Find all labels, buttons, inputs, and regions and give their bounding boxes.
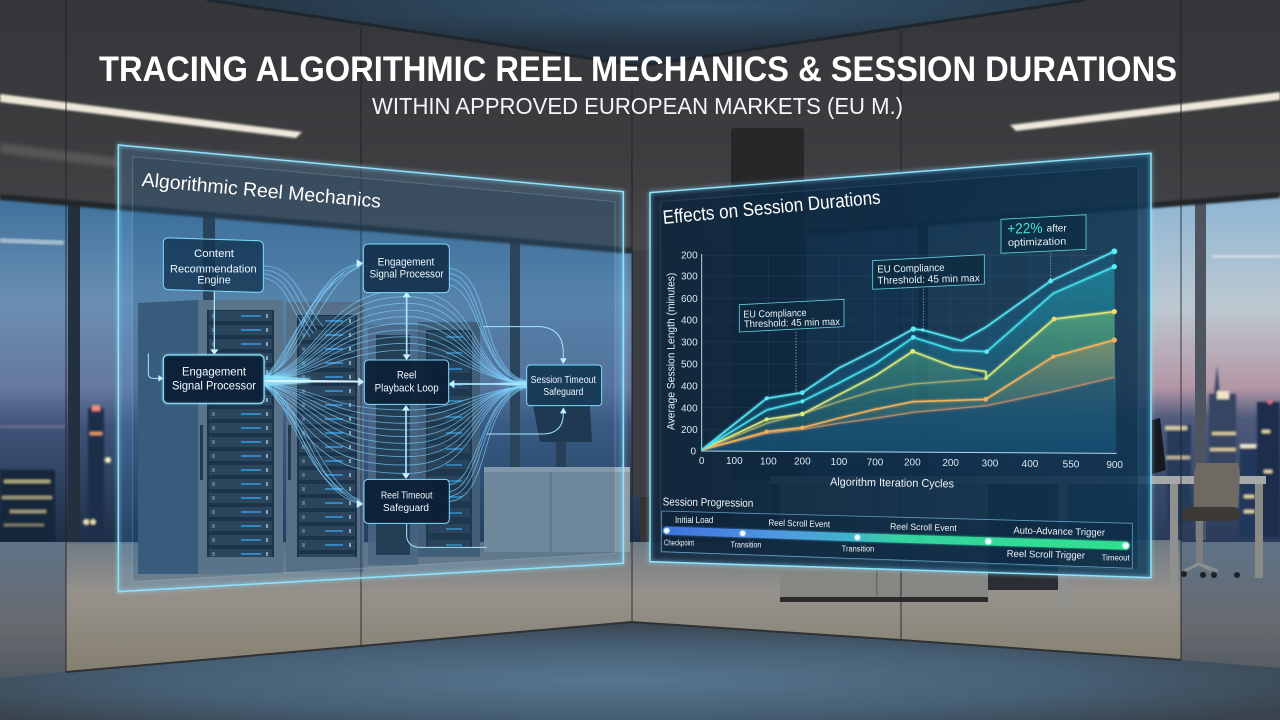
line chart — [665, 215, 1123, 490]
callout: +22% after optimization — [1001, 215, 1086, 253]
back cabinet — [484, 406, 630, 552]
panel heading: Algorithmic Reel Mechanics — [141, 170, 382, 213]
callout: compliance threshold center: Threshold: 45 min max — [877, 273, 981, 287]
arrowheads — [158, 259, 567, 508]
x axis labels: 200 — [794, 457, 811, 468]
timeline labels: Transition — [731, 540, 761, 549]
x axis labels: 550 — [1063, 459, 1080, 470]
x axis labels: 100 — [760, 456, 777, 467]
node: engagement signal processor top — [363, 244, 449, 293]
node: engagement signal processor left: Signal Processor — [172, 380, 256, 393]
y axis labels: 500 — [681, 360, 698, 371]
timeline labels: Checkpoint — [664, 538, 695, 547]
ceiling — [0, 0, 1280, 251]
y axis title: Average Session Length (minutes) — [665, 273, 677, 430]
timeline labels: Auto-Advance Trigger — [1013, 525, 1106, 539]
connector arrows — [148, 292, 563, 547]
session progression timeline — [662, 496, 1132, 568]
callout: compliance threshold center: EU Compliance — [877, 263, 945, 276]
timeline labels: Initial Load — [675, 515, 713, 525]
panel: algorithmic reel mechanics — [118, 145, 623, 592]
y axis labels: 300 — [681, 272, 698, 283]
x axis labels: 100 — [726, 456, 743, 467]
callout: +22% after optimization: +22% — [1007, 221, 1043, 238]
node: content recommendation engine: Engine — [197, 274, 231, 286]
node: engagement signal processor top: Signal Processor — [370, 269, 444, 281]
timeline heading: Session Progression — [663, 496, 753, 510]
timeline labels: Timeout — [1102, 552, 1130, 562]
desk, cabinet and chair — [770, 418, 1266, 606]
y axis labels: 200 — [681, 425, 698, 436]
x axis labels: 700 — [867, 457, 884, 468]
node: reel playback loop: Reel — [397, 370, 416, 382]
node: session timeout safeguard: Safeguard — [543, 387, 583, 398]
timeline labels — [664, 515, 1130, 562]
node: engagement signal processor top: Engagement — [378, 256, 434, 268]
x axis labels — [699, 456, 1123, 471]
timeline labels: Transition — [842, 545, 874, 554]
subtitle: WITHIN APPROVED EUROPEAN MARKETS (EU M.) — [372, 93, 903, 119]
x axis title: Algorithm Iteration Cycles — [830, 476, 954, 490]
flow lines bundle — [264, 263, 527, 504]
progress bar — [667, 531, 1126, 546]
title: TRACING ALGORITHMIC REEL MECHANICS & SESSION DURATIONS — [99, 50, 1177, 89]
node: content recommendation engine: Recommendation — [170, 263, 257, 275]
gridlines — [702, 253, 1117, 452]
milestones — [664, 528, 1129, 549]
callout: +22% after optimization: optimization — [1008, 236, 1067, 249]
node: reel playback loop: Playback Loop — [375, 382, 439, 394]
pillar — [731, 128, 804, 578]
x axis labels: 400 — [1022, 459, 1039, 470]
panel heading: Effects on Session Durations — [662, 187, 881, 229]
server racks — [138, 300, 480, 574]
area fills — [702, 251, 1116, 453]
node: reel timeout safeguard: Safeguard — [383, 503, 429, 514]
callout: compliance threshold left: EU Compliance — [743, 308, 807, 321]
bright glow at flow hubs — [264, 375, 527, 388]
floor — [0, 540, 1280, 720]
y axis labels: 0 — [691, 447, 697, 458]
callout: +22% after optimization: after — [1047, 224, 1067, 235]
y axis labels: 300 — [681, 338, 698, 349]
axes — [702, 254, 1117, 453]
city skyline with lights — [0, 365, 1280, 542]
y axis labels: 600 — [681, 294, 698, 305]
x axis labels: 300 — [982, 459, 999, 470]
x axis labels: 100 — [831, 457, 848, 468]
node: engagement signal processor left: Engagement — [182, 366, 247, 379]
dotted leader lines — [796, 253, 1051, 393]
node: engagement signal processor left — [163, 355, 264, 403]
panel frame — [118, 145, 623, 592]
node: session timeout safeguard — [527, 365, 602, 406]
node: reel timeout safeguard — [364, 479, 449, 523]
timeline labels: Reel Scroll Event — [768, 518, 831, 529]
node: content recommendation engine — [163, 238, 263, 293]
timeline labels: Reel Scroll Event — [890, 521, 957, 533]
y axis labels: 400 — [681, 316, 698, 327]
panel frame — [650, 153, 1151, 578]
y axis labels: 200 — [681, 251, 698, 262]
x axis labels: 200 — [942, 458, 959, 469]
y axis labels — [681, 251, 698, 458]
ceiling light strips — [0, 92, 1280, 138]
panel: effects on session durations — [650, 153, 1151, 578]
series lines — [702, 251, 1114, 450]
callout: compliance threshold left: Threshold: 45 min max — [744, 317, 840, 330]
x axis labels: 200 — [904, 458, 921, 469]
node: reel playback loop — [364, 360, 449, 404]
x axis labels: 0 — [699, 456, 705, 467]
timeline labels: Reel Scroll Trigger — [1007, 549, 1086, 562]
y axis labels: 400 — [681, 381, 698, 392]
windows with dusk sky — [0, 190, 1280, 544]
node: reel timeout safeguard: Reel Timeout — [381, 491, 433, 502]
node: session timeout safeguard: Session Timeout — [531, 375, 596, 386]
callout: compliance threshold left — [739, 299, 844, 332]
y axis labels: 400 — [681, 403, 698, 414]
callout: compliance threshold center — [873, 255, 984, 289]
x axis labels: 900 — [1106, 460, 1123, 471]
data points — [765, 248, 1117, 434]
node: content recommendation engine: Content — [194, 248, 235, 260]
timeline frame — [662, 511, 1132, 568]
